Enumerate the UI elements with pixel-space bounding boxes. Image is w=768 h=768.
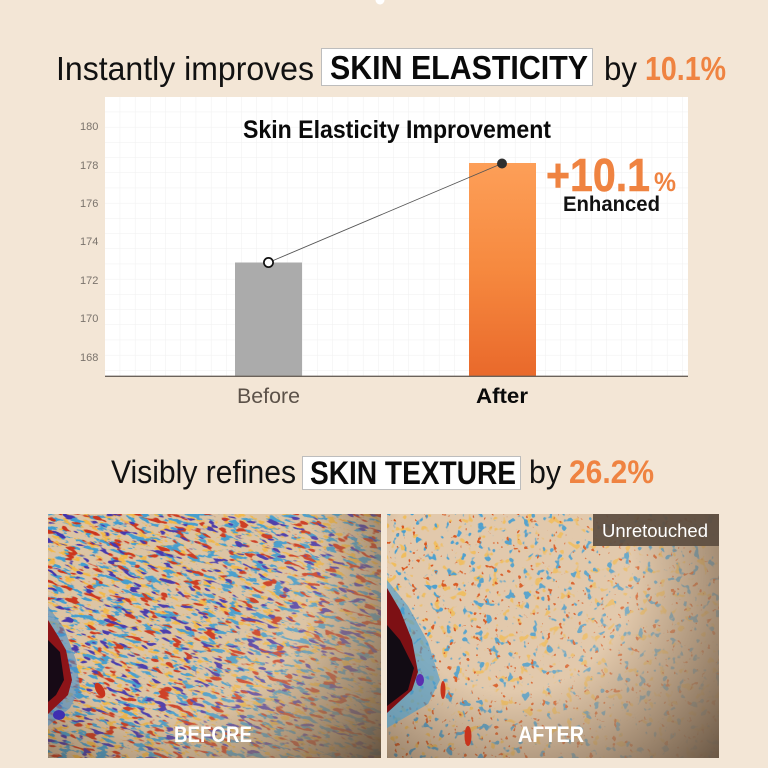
y axis labels: 170: [80, 313, 98, 325]
panel: after skin texture image: [387, 514, 719, 758]
bar: before: [235, 262, 302, 376]
callout: +10.1% enhanced: +10.1: [546, 149, 650, 201]
heading: skin elasticity: SKIN ELASTICITY: [330, 49, 588, 86]
marker: after: [497, 158, 507, 168]
heading: skin elasticity: Instantly improves: [56, 50, 314, 87]
panel: bar chart: [80, 97, 688, 408]
callout: +10.1% enhanced: [546, 149, 676, 216]
callout: +10.1% enhanced: %: [654, 167, 676, 197]
y axis labels: [80, 121, 98, 364]
heading: skin texture: SKIN TEXTURE: [310, 455, 516, 491]
heading: skin texture: [111, 454, 654, 491]
bar: after: [469, 163, 536, 376]
label: after: AFTER: [518, 722, 584, 747]
badge: unretouched: Unretouched: [602, 520, 708, 541]
heading: skin texture: by: [529, 454, 561, 490]
heading: skin elasticity: 10.1%: [645, 50, 726, 87]
trend line: [268, 164, 502, 262]
y axis labels: 174: [80, 236, 98, 248]
heading: skin elasticity: by: [604, 50, 637, 87]
panel: before skin texture image: [48, 514, 381, 758]
top white dot: [376, 0, 384, 4]
eye region: [387, 580, 472, 746]
heading: skin texture: Visibly refines: [111, 454, 296, 490]
chart title: Skin Elasticity Improvement: [243, 116, 552, 144]
y axis labels: 176: [80, 198, 98, 210]
eye region: [48, 606, 107, 726]
callout: +10.1% enhanced: Enhanced: [563, 193, 660, 216]
label: before: BEFORE: [174, 722, 252, 747]
heading: skin texture: 26.2%: [569, 454, 654, 490]
x axis line: [105, 375, 688, 377]
label: before: Before: [237, 385, 300, 408]
y axis labels: 168: [80, 352, 98, 364]
badge: unretouched: [593, 514, 719, 546]
y axis labels: 178: [80, 160, 98, 172]
y axis labels: 180: [80, 121, 98, 133]
y axis labels: 172: [80, 275, 98, 287]
heading: skin elasticity: [56, 48, 726, 87]
marker: before: [264, 258, 273, 267]
label: after: After: [476, 385, 528, 408]
